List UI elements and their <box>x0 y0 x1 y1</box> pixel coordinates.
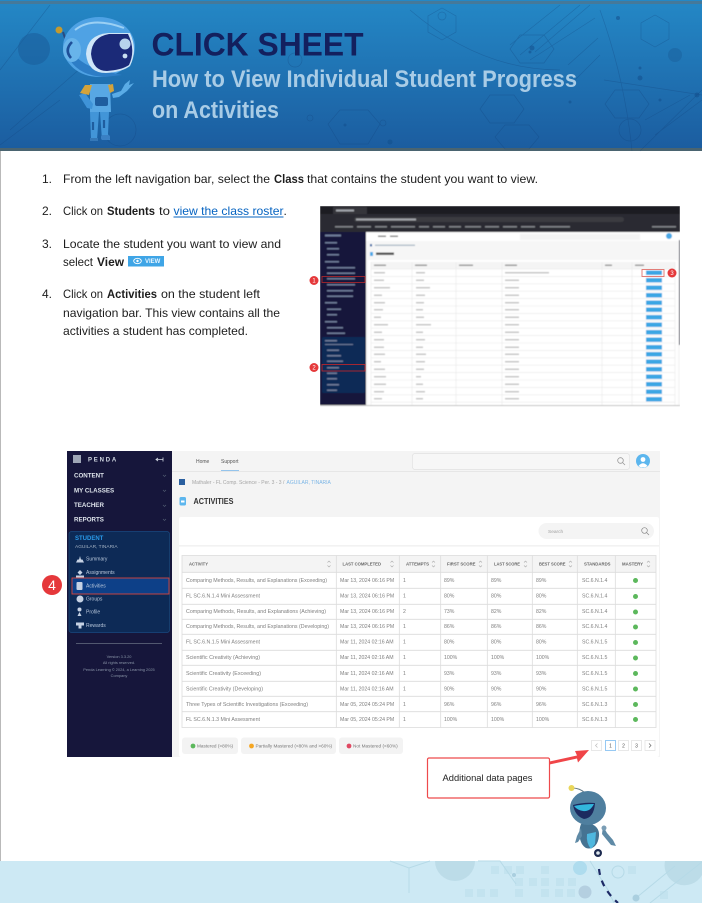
activities table: 93% <box>536 671 547 677</box>
left navigation sidebar: All rights reserved. <box>103 660 135 665</box>
activities table: SC.6.N.1.4 <box>582 624 607 630</box>
activities table: SC.6.N.1.3 <box>582 717 607 723</box>
left navigation sidebar: Assignments <box>86 570 115 576</box>
callout: additional data pages <box>428 758 550 798</box>
activities table: 86% <box>491 624 502 630</box>
activities table: ATTEMPTS <box>406 562 430 568</box>
activities table: 90% <box>536 686 547 692</box>
activities table: Mar 13, 2024 06:16 PM <box>340 624 394 630</box>
left navigation sidebar: REPORTS <box>74 516 104 524</box>
step 2 text: to <box>159 204 170 218</box>
step 4 text <box>42 287 280 338</box>
table search box <box>179 523 659 546</box>
mastery legend: Not Mastered (<60%) <box>353 744 398 748</box>
activities table: 73% <box>444 609 455 615</box>
breadcrumb: AGUILAR, TINARIA <box>286 480 332 486</box>
activities table: 100% <box>536 655 550 661</box>
activities table: Mar 05, 2024 05:24 PM <box>340 702 394 708</box>
step 3 text: VIEW <box>145 259 161 265</box>
step 2 text: . <box>284 204 287 218</box>
step 1 text: From the left navigation bar, select the <box>63 172 270 186</box>
left navigation sidebar: Summary <box>86 556 108 562</box>
activities table: 80% <box>444 594 455 600</box>
students roster screenshot: 1 <box>312 278 316 284</box>
step 4 text: Click on <box>63 287 103 301</box>
step 3 text: 3. <box>42 237 52 251</box>
activities table: Mar 11, 2024 02:16 AM <box>340 671 394 677</box>
activities table: 93% <box>491 671 502 677</box>
activities table: LAST SCORE <box>494 562 521 568</box>
breadcrumb: Mathaler - FL Comp. Science - Per. 3 - 3 / <box>192 480 285 486</box>
activities table: 86% <box>536 624 547 630</box>
left navigation sidebar <box>67 451 172 757</box>
title: CLICK SHEET <box>152 26 364 62</box>
activities table: SC.6.N.1.4 <box>582 609 607 615</box>
activities table: Mar 13, 2024 06:16 PM <box>340 594 394 600</box>
activities table: 80% <box>536 640 547 646</box>
step 4 marker <box>42 575 62 595</box>
students roster screenshot <box>310 206 680 406</box>
step 1 text: Class <box>274 172 304 186</box>
activities table: Comparing Methods, Results, and Explanations (Achieving) <box>186 609 326 615</box>
activities table: LAST COMPLETED <box>342 562 381 568</box>
activities table: Mar 11, 2024 02:16 AM <box>340 655 394 661</box>
step 4 text: 4. <box>42 287 52 301</box>
step 4 text: on the student left <box>161 287 261 301</box>
left navigation sidebar: Company <box>111 673 127 678</box>
pagination <box>592 740 655 750</box>
activities table: SC.6.N.1.4 <box>582 594 607 600</box>
activities table: 1 <box>403 686 406 692</box>
step 1 text: that contains the student you want to view. <box>307 172 538 186</box>
pagination: 1 <box>609 744 612 750</box>
top bar: Home <box>196 459 210 465</box>
icon: robot mascot <box>568 785 616 857</box>
step 3 text: Locate the student you want to view and <box>63 237 281 251</box>
activities table: ACTIVITY <box>189 562 209 568</box>
left navigation sidebar: AGUILAR, TINARIA <box>75 544 118 550</box>
activities table: SC.6.N.1.5 <box>582 640 607 646</box>
activities table: SC.6.N.1.5 <box>582 686 607 692</box>
activities table: MASTERY <box>622 562 644 568</box>
activities table: 1 <box>403 624 406 630</box>
activities table: SC.6.N.1.5 <box>582 655 607 661</box>
left navigation sidebar: TEACHER <box>74 502 104 509</box>
activities table: Mar 11, 2024 02:16 AM <box>340 686 394 692</box>
activities table: Scientific Creativity (Achieving) <box>186 655 260 661</box>
step 4 text: navigation bar. This view contains all the <box>63 306 280 320</box>
icon: astronaut mascot <box>56 17 135 141</box>
activities table: Mar 05, 2024 05:24 PM <box>340 717 394 723</box>
left navigation sidebar: CONTENT <box>74 472 104 480</box>
activities table: 96% <box>444 702 455 708</box>
table search box: Search <box>548 529 564 535</box>
callout: additional data pages: Additional data pages <box>442 773 533 784</box>
activities table: FL SC.6.N.1.4 Mini Assessment <box>186 594 261 600</box>
activities table: 1 <box>403 640 406 646</box>
activities screenshot <box>42 451 660 757</box>
main content background <box>172 451 660 757</box>
activities table: FIRST SCORE <box>447 562 476 568</box>
mastery legend: Mastered (>80%) <box>197 744 234 748</box>
activities table: 90% <box>491 686 502 692</box>
activities table: BEST SCORE <box>539 562 566 568</box>
activities table: SC.6.N.1.3 <box>582 702 607 708</box>
step 3 text: View <box>97 255 125 269</box>
activities table <box>182 556 656 728</box>
activities table: Scientific Creativity (Developing) <box>186 686 263 692</box>
activities table: 1 <box>403 702 406 708</box>
step 2 text: 2. <box>42 204 52 218</box>
activities table: 80% <box>444 640 455 646</box>
activities table: 90% <box>444 686 455 692</box>
activities table: Scientific Creativity (Exceeding) <box>186 671 261 677</box>
activities table: 82% <box>491 609 502 615</box>
activities table: 89% <box>491 578 502 584</box>
activities table: 96% <box>491 702 502 708</box>
activities table: 80% <box>491 640 502 646</box>
step 3 text <box>42 237 281 269</box>
activities table: 80% <box>536 594 547 600</box>
step 3 text: select <box>63 255 94 269</box>
subtitle <box>152 66 577 124</box>
activities table: STANDARDS <box>584 562 611 568</box>
activities table: 89% <box>536 578 547 584</box>
left navigation sidebar: Profile <box>86 610 100 616</box>
activities table: 100% <box>536 717 550 723</box>
mastery legend: Partially Mastered (<80% and >60%) <box>256 744 333 748</box>
page heading: activities: ACTIVITIES <box>194 497 234 506</box>
activities table: 1 <box>403 578 406 584</box>
activities table: 100% <box>491 655 505 661</box>
activities table: Mar 13, 2024 06:16 PM <box>340 609 394 615</box>
footer band <box>0 861 702 903</box>
activities table: 89% <box>444 578 455 584</box>
activities table: 1 <box>403 671 406 677</box>
breadcrumb <box>179 479 332 486</box>
activities table: 100% <box>444 655 458 661</box>
activities table: FL SC.6.N.1.3 Mini Assessment <box>186 717 261 723</box>
step 2 text: Click on <box>63 204 103 218</box>
activities table: Comparing Methods, Results, and Explanations (Exceeding) <box>186 578 327 584</box>
subtitle: on Activities <box>152 97 279 124</box>
top bar <box>172 454 660 472</box>
activities table: Three Types of Scientific Investigations (Exceeding) <box>186 702 308 708</box>
activities table: Mar 13, 2024 06:16 PM <box>340 578 394 584</box>
step 2 text: Students <box>107 204 155 218</box>
left navigation sidebar: Version 3.3.20 <box>107 654 132 659</box>
activities table: SC.6.N.1.4 <box>582 578 607 584</box>
left navigation sidebar: STUDENT <box>75 536 104 542</box>
activities table: 96% <box>536 702 547 708</box>
activities table: 1 <box>403 594 406 600</box>
students roster screenshot: 2 <box>312 366 316 372</box>
step 1 text <box>42 172 538 186</box>
step 4 text: activities a student has completed. <box>63 324 248 338</box>
left navigation sidebar: PENDA <box>88 458 118 464</box>
pagination: 2 <box>622 744 625 750</box>
left navigation sidebar: Penda Learning © 2024, a Learning 2025 <box>83 667 155 672</box>
step 4 marker: 4 <box>48 577 56 593</box>
activities table: 86% <box>444 624 455 630</box>
activities table: 100% <box>491 717 505 723</box>
activities table: 100% <box>444 717 458 723</box>
activities table: Mar 11, 2024 02:16 AM <box>340 640 394 646</box>
mastery legend <box>182 738 403 754</box>
activities table: 93% <box>444 671 455 677</box>
students roster screenshot: 3 <box>670 271 674 277</box>
activities table: SC.6.N.1.5 <box>582 671 607 677</box>
arrow to pagination <box>550 750 589 764</box>
activities card <box>179 517 659 757</box>
step 2 text: view the class roster <box>174 204 284 218</box>
activities table: 2 <box>403 609 406 615</box>
left navigation sidebar: Groups <box>86 596 103 602</box>
step 2 text <box>42 204 287 218</box>
left navigation sidebar: Rewards <box>86 623 106 629</box>
left navigation sidebar: MY CLASSES <box>74 488 114 494</box>
top bar: Support <box>221 459 239 465</box>
header banner <box>0 0 702 151</box>
pagination: 3 <box>635 744 638 750</box>
activities table: 1 <box>403 655 406 661</box>
activities table: 1 <box>403 717 406 723</box>
left navigation sidebar: Activities <box>86 584 106 590</box>
step 4 text: Activities <box>107 287 157 301</box>
activities table: Comparing Methods, Results, and Explanations (Developing) <box>186 624 329 630</box>
subtitle: How to View Individual Student Progress <box>152 66 577 93</box>
activities table: 82% <box>536 609 547 615</box>
activities table: FL SC.6.N.1.5 Mini Assessment <box>186 640 261 646</box>
activities table: 80% <box>491 594 502 600</box>
step 1 text: 1. <box>42 172 52 186</box>
